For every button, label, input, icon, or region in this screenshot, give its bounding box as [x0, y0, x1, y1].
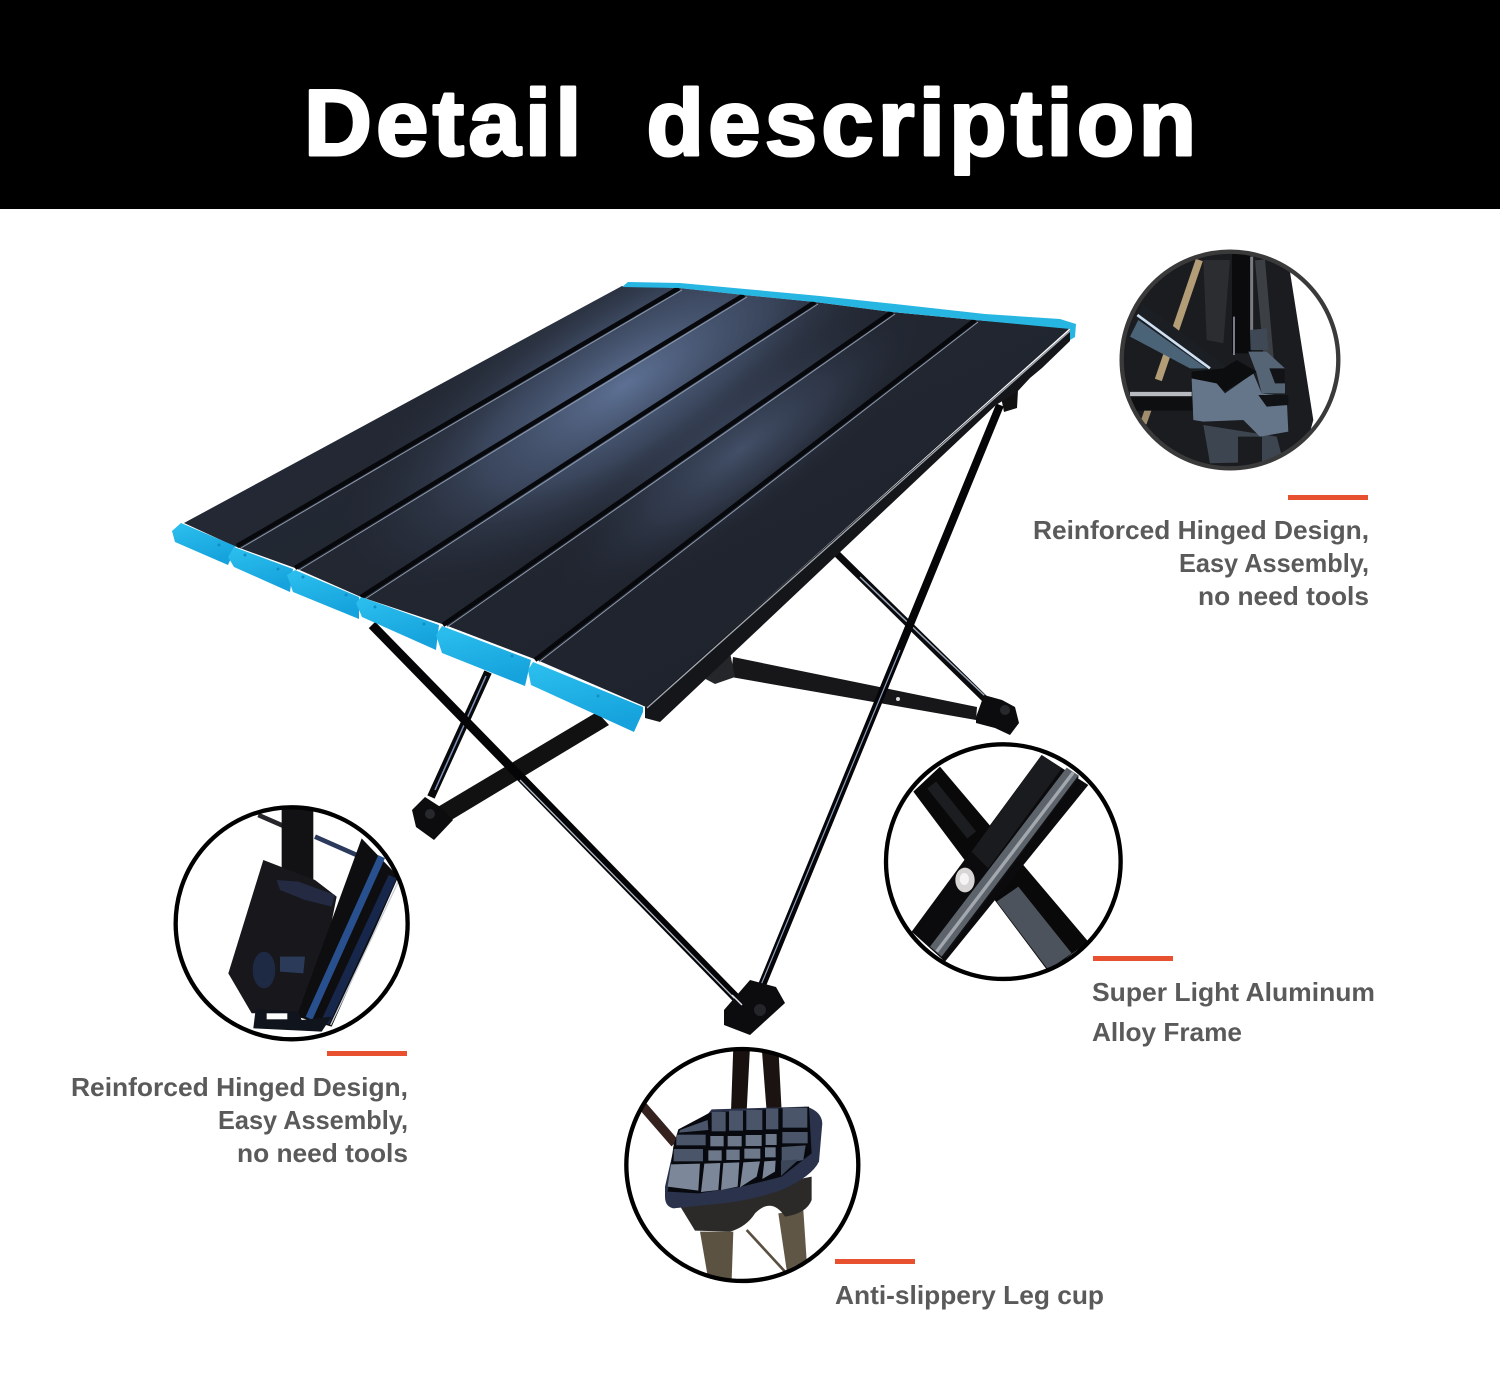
callout text: Reinforced Hinged Design,	[71, 1072, 408, 1102]
title banner	[0, 0, 1500, 209]
callout text: Easy Assembly,	[1179, 548, 1369, 578]
folding table illustration	[172, 282, 1076, 1035]
callout text: Anti-slippery Leg cup	[835, 1280, 1104, 1310]
callout text: no need tools	[237, 1138, 408, 1168]
table legs and frame	[372, 390, 1019, 1035]
callout: top right hinge	[1033, 495, 1369, 611]
title: Detail description	[304, 70, 1196, 175]
callout text	[1033, 515, 1369, 611]
table underside	[645, 330, 1070, 722]
blue front end caps	[172, 523, 643, 732]
accent bar	[1093, 956, 1173, 961]
detail circle: hinge top right	[1120, 250, 1340, 470]
detail circle: anti-slip leg cup	[626, 1047, 858, 1281]
callout text	[71, 1072, 408, 1168]
callout text: Easy Assembly,	[218, 1105, 408, 1135]
callout text: Alloy Frame	[1092, 1017, 1242, 1047]
callout text: Super Light Aluminum	[1092, 977, 1375, 1007]
blue back end caps	[622, 282, 1076, 340]
foot: left rear	[412, 797, 453, 840]
callout: aluminum frame	[1092, 956, 1375, 1047]
callout: leg cup	[835, 1259, 1104, 1310]
accent bar	[1288, 495, 1368, 500]
callout text: Reinforced Hinged Design,	[1033, 515, 1369, 545]
aluminium table top	[184, 286, 1070, 708]
accent bar	[835, 1259, 915, 1264]
foot: right rear	[976, 695, 1019, 735]
top hinge	[1000, 390, 1018, 412]
callout: bottom left hinge	[71, 1051, 408, 1168]
foot: front	[724, 980, 785, 1035]
callout text	[1092, 977, 1375, 1047]
hinge connector	[698, 648, 735, 684]
detail circle: hinge bottom left	[176, 807, 408, 1039]
callout text: no need tools	[1198, 581, 1369, 611]
detail circle: aluminum cross frame	[886, 744, 1121, 979]
accent bar	[327, 1051, 407, 1056]
